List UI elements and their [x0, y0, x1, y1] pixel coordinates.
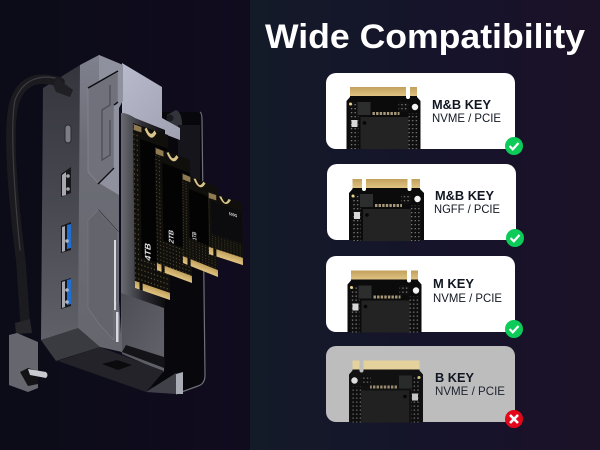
bottom chamfer	[41, 328, 100, 361]
cable connector	[53, 78, 73, 97]
circuit trace lines	[102, 85, 112, 322]
lower hexagon detail	[88, 210, 118, 340]
card: B key (not supported)	[326, 346, 523, 428]
bottom connector port	[102, 360, 132, 370]
underside	[58, 347, 164, 392]
front face	[78, 55, 123, 352]
SSD edge connector	[346, 87, 420, 149]
sublabel: NVME / PCIE	[432, 111, 501, 125]
USB-A port 1	[61, 167, 71, 197]
SSD edge connector	[349, 360, 423, 422]
product: M.2 hub with SSDs	[9, 55, 243, 394]
USB-A port 2 (blue)	[61, 222, 71, 253]
SSD 1TB	[182, 173, 218, 277]
check badge	[505, 137, 523, 155]
card: M key	[326, 256, 523, 338]
label: M KEY	[433, 276, 474, 291]
SSD 2TB: 2TB	[167, 228, 176, 245]
slit lines	[88, 71, 118, 232]
card background	[326, 256, 515, 332]
cross badge	[505, 410, 523, 428]
SSD 4TB: 4TB	[143, 241, 153, 262]
silver bracket	[122, 63, 180, 140]
lower block	[121, 293, 164, 372]
SSD 2TB	[155, 147, 192, 283]
bottom slot	[122, 345, 164, 368]
label: M&B KEY	[435, 188, 494, 203]
card background	[326, 346, 515, 422]
card: M&B key NVMe	[326, 73, 523, 155]
SSD 500G: 500G	[229, 212, 237, 219]
sublabel: NVME / PCIE	[433, 291, 502, 305]
background: right panel	[250, 0, 600, 450]
SSD 4TB	[133, 123, 170, 300]
left face	[41, 65, 80, 340]
sublabel: NGFF / PCIE	[434, 202, 500, 216]
label: M&B KEY	[432, 97, 491, 112]
inner panel	[121, 113, 165, 370]
USB-C port	[65, 125, 71, 143]
title: Wide Compatibility	[265, 18, 585, 56]
back plate	[130, 112, 205, 394]
card background	[327, 164, 516, 240]
label: B KEY	[435, 370, 474, 385]
card background	[326, 73, 515, 149]
clip on back plate	[166, 110, 200, 185]
SSD 500G	[208, 192, 243, 265]
silver strip	[114, 240, 118, 342]
sublabel: NVME / PCIE	[435, 384, 505, 398]
USB-C plug housing	[9, 319, 48, 392]
check badge	[506, 229, 524, 247]
cable	[11, 77, 60, 322]
card: M&B key NGFF	[327, 164, 524, 247]
SSD edge connector	[349, 179, 424, 241]
background: left panel	[0, 0, 250, 450]
silver corner of front face	[99, 55, 123, 195]
upper hexagon detail	[88, 72, 118, 183]
SSD 1TB: 1TB	[192, 231, 198, 242]
USB-A port 3 (blue)	[61, 278, 71, 309]
SSD edge connector	[348, 270, 422, 332]
check badge	[505, 320, 523, 338]
